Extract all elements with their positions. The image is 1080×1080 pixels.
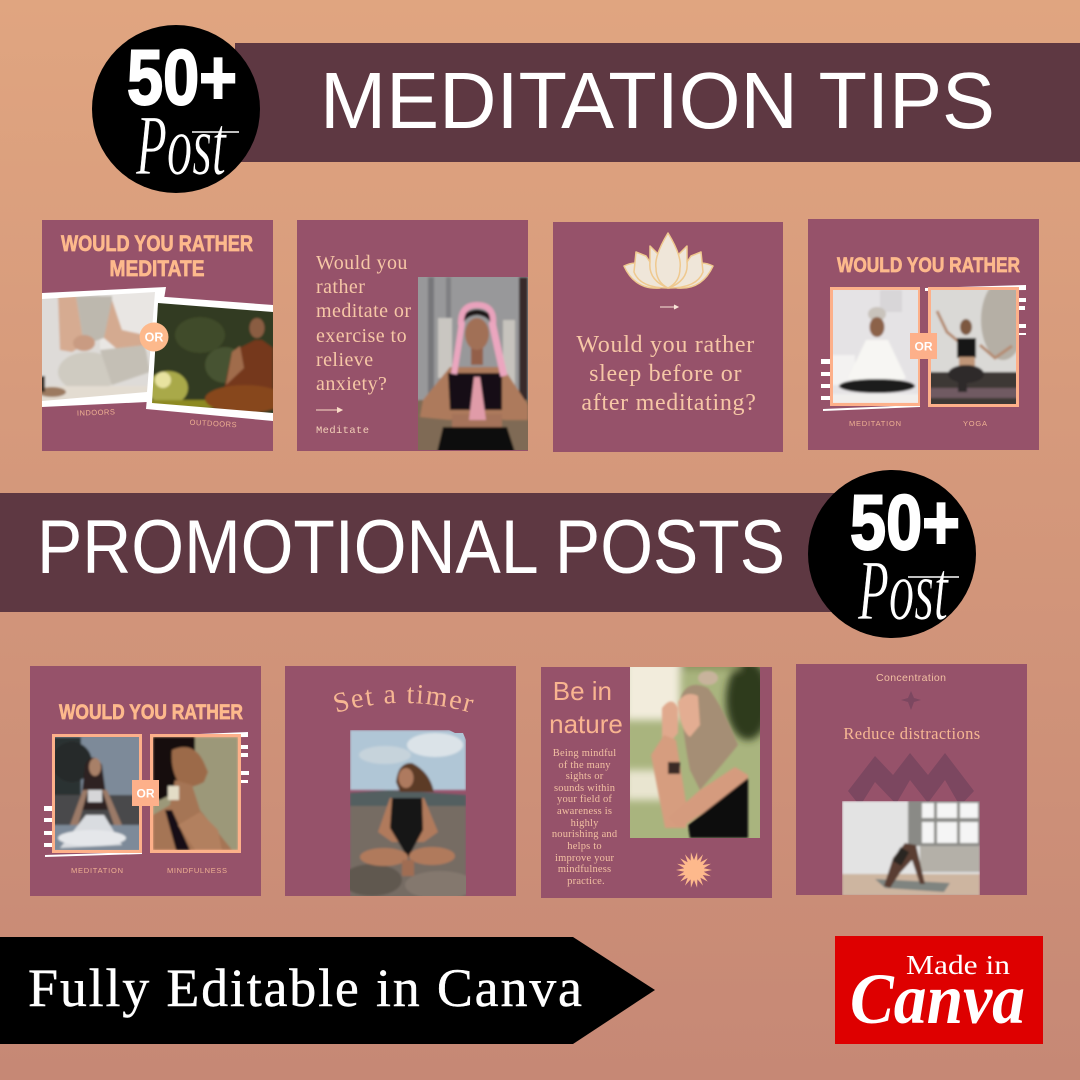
card question text: exercise to [316,325,407,347]
card kicker: Concentration [876,672,946,684]
post card: exercise or meditate [297,220,530,453]
card question text: relieve [316,349,374,371]
card body text: of the many [558,760,611,771]
ribbon: fully editable in canva [0,937,655,1044]
badge: or: OR [136,786,155,800]
card body text: your field of [557,794,612,805]
card question text: sleep before or [589,361,742,387]
label: meditation: MEDITATION [71,866,123,875]
label: meditate: Meditate [316,425,369,437]
photo: indoors meditation [42,292,155,401]
card body text: sights or [566,771,604,782]
badge circle [808,470,976,638]
photo frame: mindfulness [150,734,241,853]
label: outdoors: OUTDOORS [189,418,237,429]
photo: woman in white shirt [830,288,920,404]
badge number: 50+ [127,33,237,121]
icon: lotus [624,233,713,288]
photo: woman in nature [630,667,760,838]
card body text: nourishing and [552,829,618,840]
card question text: rather [316,276,365,298]
photo: woman with eyes closed [153,737,238,850]
post card: sleep before or after [553,222,783,452]
post card: set a timer [285,666,516,896]
white accent strokes [821,285,1026,411]
card heading: Reduce distractions [843,724,981,743]
label: indoors: INDOORS [77,407,115,418]
badge: made in canva [835,936,1043,1044]
card heading: Be in [553,676,612,706]
badge: or: OR [914,340,933,354]
ribbon text: Fully Editable in Canva [28,958,582,1018]
photo frame: yoga [928,287,1019,407]
card body text: mindfulness [558,864,611,875]
icon: four point star [901,691,921,710]
badge script word: Post [857,542,949,638]
badge number: 50+ [850,478,960,566]
badge: or [910,333,937,359]
card body text: helps to [567,841,602,852]
title: promotional posts: PROMOTIONAL POSTS [37,505,785,590]
label: yoga: YOGA [963,419,987,428]
card title: WOULD YOU RATHER [59,701,243,724]
card body text: awareness is [557,806,612,817]
badge: 50+ post middle [808,470,976,638]
photo frame: outdoors [146,297,273,421]
card body text: improve your [555,853,615,864]
label: meditation: MEDITATION [849,419,901,428]
card question text: anxiety? [316,373,387,395]
card question text: after meditating? [581,390,757,416]
badge small text: Made in [906,950,1011,980]
post card: reduce distractions [796,664,1027,896]
zigzag shape [848,753,974,806]
post card: be in nature [541,655,772,898]
white accent strokes [44,732,249,857]
arrow [660,305,678,309]
badge: 50+ post top [92,25,260,193]
curved card title: Set a timer [334,685,474,712]
title: meditation tips: MEDITATION TIPS [320,56,995,145]
photo: woman seated outdoors [52,735,141,851]
photo frame: meditation [830,287,920,406]
card body text: highly [571,818,599,829]
photo: downward dog in studio [842,801,980,896]
banner: meditation tips [235,43,1080,162]
label: mindfulness: MINDFULNESS [167,866,227,875]
card body text: sounds within [554,783,616,794]
arrow [316,408,342,412]
photo frame: indoors [42,287,166,407]
ribbon shape [0,937,655,1044]
banner bar [235,43,1080,162]
photo: woman with pink braids [416,275,530,453]
banner bar [0,493,835,612]
badge: or [132,780,159,806]
card body text: Being mindful [553,748,616,759]
post card: meditation or mindfulness [30,666,261,896]
badge logo word: Canva [850,959,1025,1039]
icon: sun [676,852,712,888]
banner: promotional posts [0,493,835,612]
badge script word: Post [135,97,227,193]
badge: or [140,322,168,352]
post card: would you rather meditate [38,220,285,451]
photo: outdoors monk [152,303,273,413]
photo: woman balancing [931,290,1016,404]
photo frame: meditation [52,734,142,853]
post card: would you rather meditate: MEDITATE [110,256,204,281]
card title: WOULD YOU RATHER [837,254,1020,277]
card question text: meditate or [316,300,411,322]
card body text: practice. [567,876,605,887]
badge circle [92,25,260,193]
card question text: Would you [316,252,408,274]
post card: meditation or yoga [808,219,1039,450]
photo: woman on rocks [350,730,466,896]
card title: WOULD YOU RATHER [61,231,253,256]
card heading: nature [549,709,623,739]
badge: or: OR [145,330,163,344]
card question text: Would you rather [576,332,755,358]
